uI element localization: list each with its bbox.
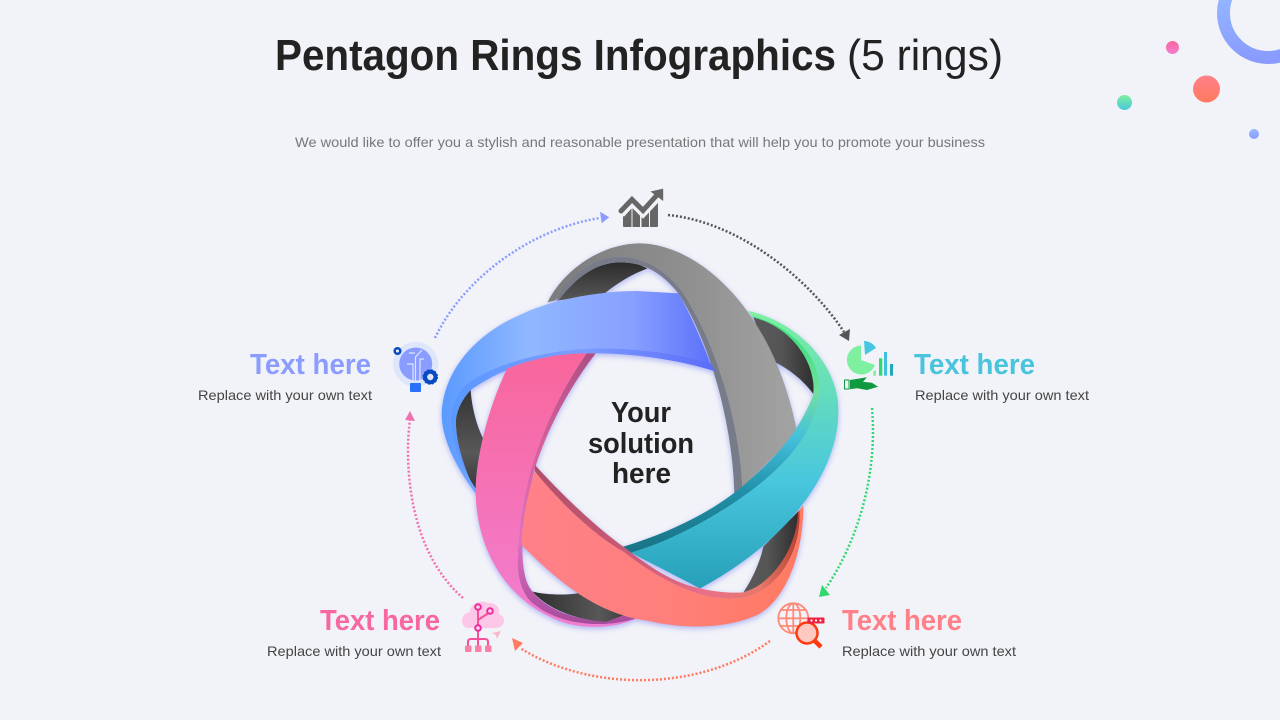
text block: bottom left: Replace with your own text	[267, 643, 441, 659]
text block: left: Replace with your own text	[198, 387, 372, 403]
center label	[588, 397, 694, 490]
ring: green to teal	[623, 311, 838, 588]
arrow: dark, top to right	[668, 215, 850, 341]
dark inner ring backs	[456, 262, 814, 622]
center label: solution	[588, 428, 694, 460]
arrow: pink, bottom left to left	[405, 411, 463, 598]
text block: bottom right: Text here	[842, 605, 962, 637]
icon: globe with magnifier	[778, 603, 824, 647]
center label: Your	[611, 397, 671, 429]
text block: bottom right: Replace with your own text	[842, 643, 1016, 659]
text block: bottom right	[842, 605, 1016, 659]
center label: here	[612, 458, 671, 490]
arrow: green, right to bottom right	[819, 408, 873, 597]
text block: left: Text here	[250, 349, 371, 381]
ring: gray	[548, 243, 797, 494]
icon: light bulb with gears	[393, 342, 438, 392]
subtitle: We would like to offer you a stylish and reasonable presentation that will help you to promote your business	[295, 134, 985, 150]
icon: pie chart on hand	[844, 341, 893, 390]
arrow: coral, bottom right to bottom left	[512, 638, 770, 680]
title: (5 rings)	[847, 31, 1003, 80]
title: Pentagon Rings Infographics	[275, 31, 836, 80]
ring: pink	[476, 353, 637, 627]
text block: bottom left: Text here	[320, 605, 440, 637]
text block: bottom left	[267, 605, 441, 659]
icon: cloud network	[462, 602, 504, 652]
text block: right: Replace with your own text	[915, 387, 1089, 403]
icon: rising bar chart	[621, 189, 663, 227]
ring: coral	[522, 465, 803, 627]
decorative ring and dots	[1117, 0, 1280, 139]
text block: right: Text here	[914, 349, 1035, 381]
text block: right	[914, 349, 1089, 403]
text block: left	[198, 349, 372, 403]
ring: blue	[442, 291, 716, 495]
interlocked pentagon rings	[442, 243, 838, 627]
arrow: blue, left to top	[435, 212, 609, 338]
